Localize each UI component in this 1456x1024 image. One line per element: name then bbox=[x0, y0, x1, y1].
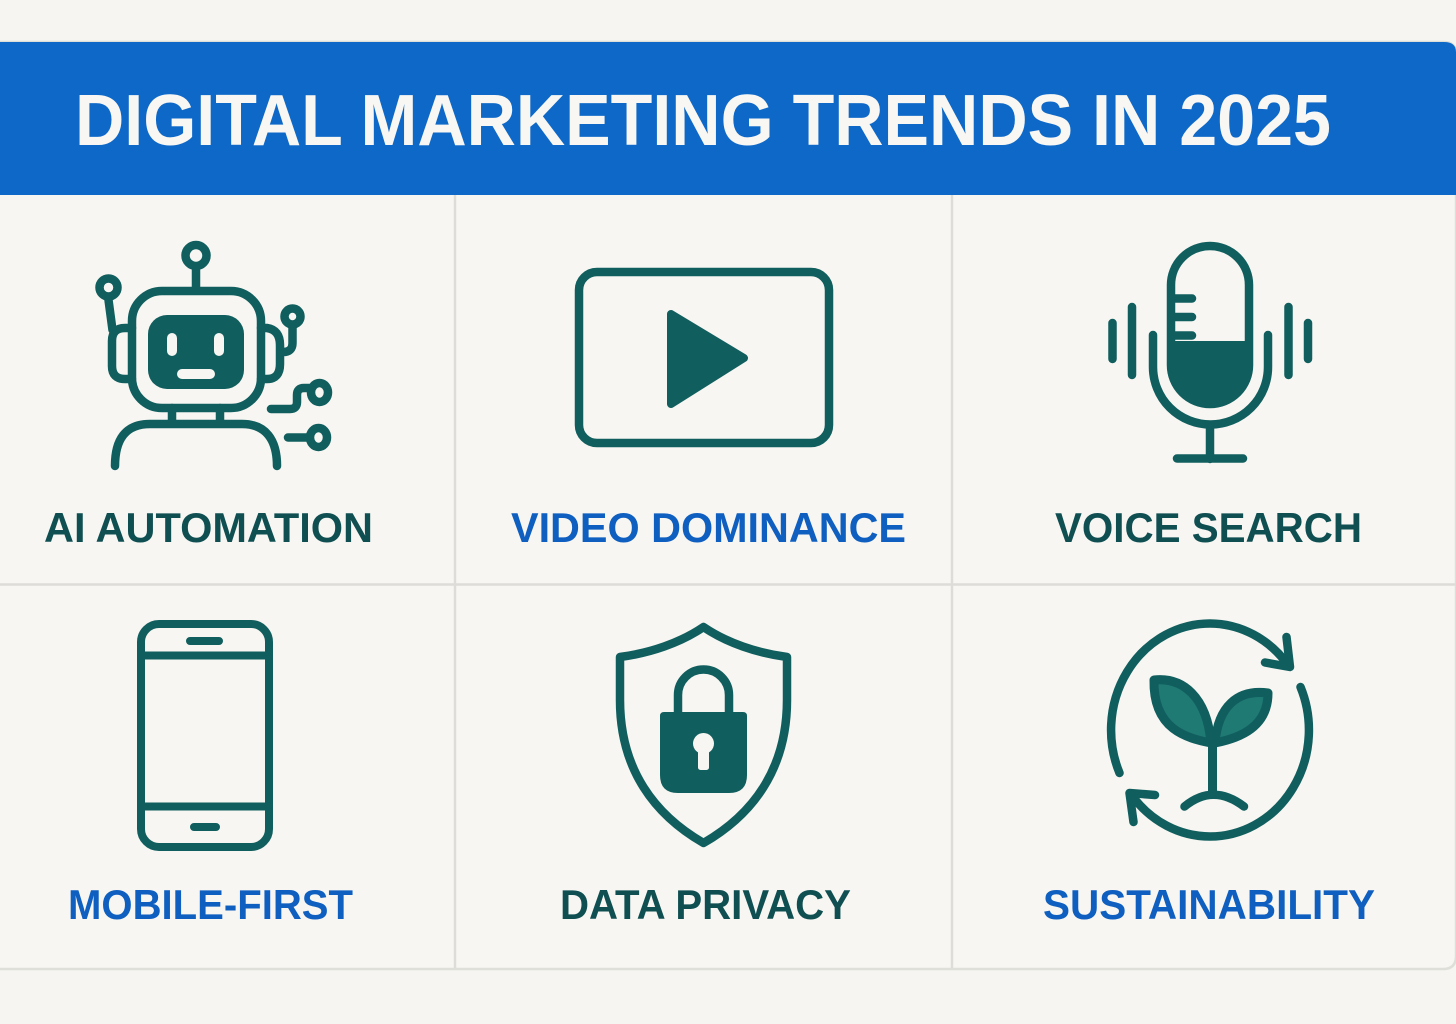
panel: video dominance bbox=[511, 272, 906, 551]
icon: robot bbox=[100, 245, 328, 466]
icon: smartphone bbox=[141, 624, 269, 847]
label: sustainability: SUSTAINABILITY bbox=[1043, 881, 1375, 928]
panel: data privacy bbox=[560, 627, 851, 928]
icon: sprout in recycling arrows bbox=[1111, 624, 1309, 836]
label: data privacy: DATA PRIVACY bbox=[560, 881, 851, 928]
label: mobile-first: MOBILE-FIRST bbox=[68, 881, 353, 928]
panel: sustainability bbox=[1043, 624, 1375, 928]
label: AI automation: AI AUTOMATION bbox=[44, 504, 373, 551]
label: voice search: VOICE SEARCH bbox=[1055, 504, 1362, 551]
panel: voice search bbox=[1055, 246, 1362, 551]
header banner bbox=[0, 42, 1456, 195]
icon: video player bbox=[579, 272, 829, 443]
panel: AI automation bbox=[44, 245, 373, 551]
icon: shield with padlock bbox=[620, 627, 787, 843]
icon: microphone bbox=[1112, 246, 1308, 459]
label: video dominance: VIDEO DOMINANCE bbox=[511, 504, 906, 551]
panel: mobile-first bbox=[68, 624, 353, 928]
title: DIGITAL MARKETING TRENDS IN 2025 bbox=[75, 81, 1331, 161]
